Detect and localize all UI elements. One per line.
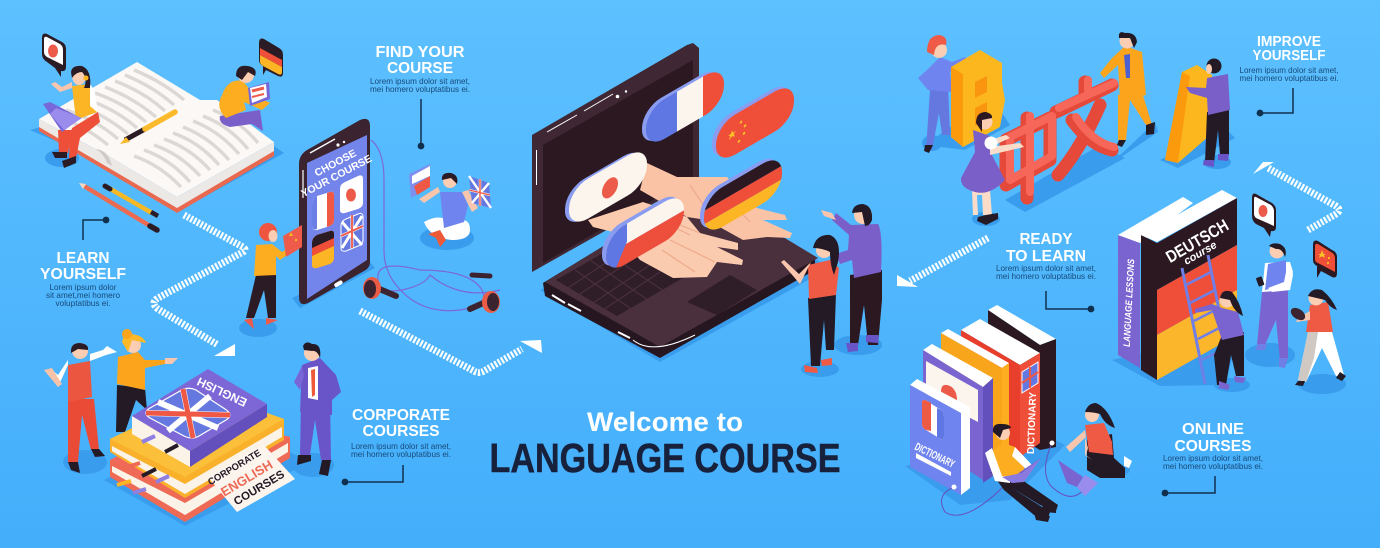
paper label: CORPORATE <box>206 448 263 488</box>
dashed path: phone to laptop <box>360 311 542 372</box>
person: boy with flags <box>409 164 491 250</box>
book: language lessons <box>1118 197 1193 368</box>
dictionary books illustration <box>905 305 1132 522</box>
heading: improve yourself: mei homero voluptatibus ei. <box>1240 73 1338 83</box>
phone screen text: YOUR COURSE <box>299 153 374 200</box>
heading: online courses: Lorem ipsum dolor sit amet, <box>1163 453 1263 463</box>
person: girl with laptop on book <box>43 66 100 168</box>
heading: ready to learn: mei homero voluptatibus ei. <box>996 271 1096 281</box>
hands <box>588 163 792 278</box>
pill flag: Germany <box>700 158 782 230</box>
pill flag: Japan <box>565 142 647 232</box>
heading: corporate courses: Lorem ipsum dolor sit amet, <box>351 441 451 451</box>
person: girl in purple dress <box>961 112 1024 226</box>
dashed path: improve yourself arrow <box>1253 162 1339 230</box>
main title: LANGUAGE COURSE <box>490 435 840 481</box>
heading: corporate courses <box>351 407 451 459</box>
book: purple English top <box>132 369 267 467</box>
book: purple English top: ENGLISH <box>195 374 249 410</box>
book: yellow middle <box>110 392 284 498</box>
person: woman in blue suit <box>918 35 1010 153</box>
book: deutsch course: course <box>1182 239 1219 268</box>
person: red-haired girl with China flag <box>239 223 302 337</box>
person: man in purple suit <box>292 342 341 477</box>
connector: online courses <box>1162 476 1215 496</box>
person: man in purple hoodie <box>1186 58 1231 169</box>
person: man pointing <box>821 204 882 355</box>
paper label: ENGLISH <box>218 457 275 499</box>
heading: find your course: FIND YOUR <box>376 44 465 61</box>
heading: learn yourself: sit amet,mei homero <box>46 290 120 300</box>
heading: learn yourself <box>40 250 126 308</box>
heading: corporate courses: COURSES <box>362 423 440 440</box>
book: red bottom <box>110 414 290 522</box>
heading: ready to learn: TO LEARN <box>1006 248 1086 265</box>
book: red dictionary: DICTIONARY <box>1026 392 1039 454</box>
flag tile: UK <box>341 213 363 251</box>
flag tile: Japan <box>340 175 363 213</box>
dashed path: ready to learn arrow <box>897 238 988 287</box>
connector: corporate courses <box>342 465 403 485</box>
block characters Chinese <box>1005 80 1125 212</box>
book: yellow <box>941 329 1009 470</box>
heading: learn yourself: voluptatibus ei. <box>56 298 110 308</box>
heading: corporate courses: mei homero voluptatibus ei. <box>351 449 451 459</box>
heading: improve yourself: Lorem ipsum dolor sit amet, <box>1240 65 1338 75</box>
connector: learn yourself <box>83 217 109 240</box>
book: purple Japan <box>923 344 993 483</box>
paper label: COURSES <box>232 468 287 508</box>
person: boy with tablet on book <box>219 66 270 131</box>
icon: pencils <box>79 183 158 230</box>
person: woman in orange <box>116 329 178 432</box>
heading: improve yourself <box>1240 33 1338 83</box>
computer cables <box>942 443 1090 515</box>
heading: find your course: mei homero voluptatibus ei. <box>370 84 470 94</box>
person: man in red vest <box>44 343 117 474</box>
person: man sitting with laptop <box>985 424 1058 522</box>
main title <box>490 407 840 481</box>
heading: online courses: mei homero voluptatibus ei. <box>1163 461 1263 471</box>
person: woman in red <box>781 235 839 377</box>
main title: Welcome to <box>587 407 743 437</box>
heading: ready to learn <box>996 231 1096 281</box>
letter blocks illustration <box>918 32 1235 226</box>
connector: find your course <box>418 99 424 149</box>
heading: learn yourself: Lorem ipsum dolor <box>50 282 117 292</box>
laptop shadow <box>540 200 830 362</box>
book: deutsch course <box>1141 190 1237 380</box>
bookmarks <box>117 436 178 493</box>
laptop screen <box>532 43 699 272</box>
laptop base <box>543 187 818 358</box>
Deutsch book illustration <box>1112 190 1346 394</box>
heading: find your course: COURSE <box>387 60 453 77</box>
heading: find your course: Lorem ipsum dolor sit amet, <box>370 76 470 86</box>
icon: speech bubble Japan <box>42 34 66 77</box>
paper label <box>206 444 295 512</box>
phone earphone wire and buds <box>363 140 500 313</box>
book: red dictionary <box>961 319 1040 457</box>
pill flag: Czech <box>602 196 684 268</box>
phone screen text: CHOOSE <box>313 147 359 179</box>
icon: fountain pen <box>120 112 175 144</box>
heading: corporate courses: CORPORATE <box>352 407 450 424</box>
heading: online courses: ONLINE <box>1182 421 1244 438</box>
heading: improve yourself: YOURSELF <box>1252 47 1326 64</box>
book: black <box>988 305 1056 450</box>
person: woman with tablet <box>1289 289 1346 394</box>
heading: learn yourself: YOURSELF <box>40 266 126 283</box>
person: man in yellow suit <box>1100 32 1158 168</box>
heading: online courses: COURSES <box>1174 438 1252 455</box>
heading: learn yourself: LEARN <box>56 250 110 267</box>
open book illustration <box>30 62 284 213</box>
ladder <box>1182 255 1226 384</box>
flag tile: France <box>312 192 334 230</box>
book: deutsch course: DEUTSCH <box>1163 216 1232 267</box>
connector: improve yourself <box>1257 88 1293 116</box>
heading: find your course <box>370 44 470 94</box>
book: blue France dictionary <box>910 379 970 495</box>
pill flag: France <box>642 72 724 142</box>
pill flag: China <box>712 76 794 168</box>
heading: online courses <box>1163 421 1263 471</box>
icon: speech bubble China <box>1313 240 1337 278</box>
person: woman kneeling with laptop <box>1058 403 1132 496</box>
person: girl climbing ladder <box>1195 291 1250 392</box>
book: language lessons: LANGUAGE LESSONS <box>1122 258 1137 347</box>
smartphone app screen <box>292 119 375 308</box>
icon: speech bubble Germany <box>259 38 283 77</box>
person: man with vest and phone <box>1245 243 1295 368</box>
block letter B <box>951 50 1010 147</box>
laptop with hands and flags <box>532 43 830 362</box>
block letter A <box>1160 65 1235 168</box>
flag tile: Germany <box>312 231 334 268</box>
corporate book stack <box>104 369 310 526</box>
heading: improve yourself: IMPROVE <box>1257 33 1321 50</box>
book: blue France dictionary: DICTIONARY <box>913 441 957 471</box>
icon: speech bubble Japan <box>1252 194 1276 237</box>
heading: ready to learn: READY <box>1020 231 1073 248</box>
heading: ready to learn: Lorem ipsum dolor sit amet, <box>996 263 1096 273</box>
connector: ready to learn <box>1046 291 1094 312</box>
dashed path: book to corporate courses <box>154 215 245 356</box>
